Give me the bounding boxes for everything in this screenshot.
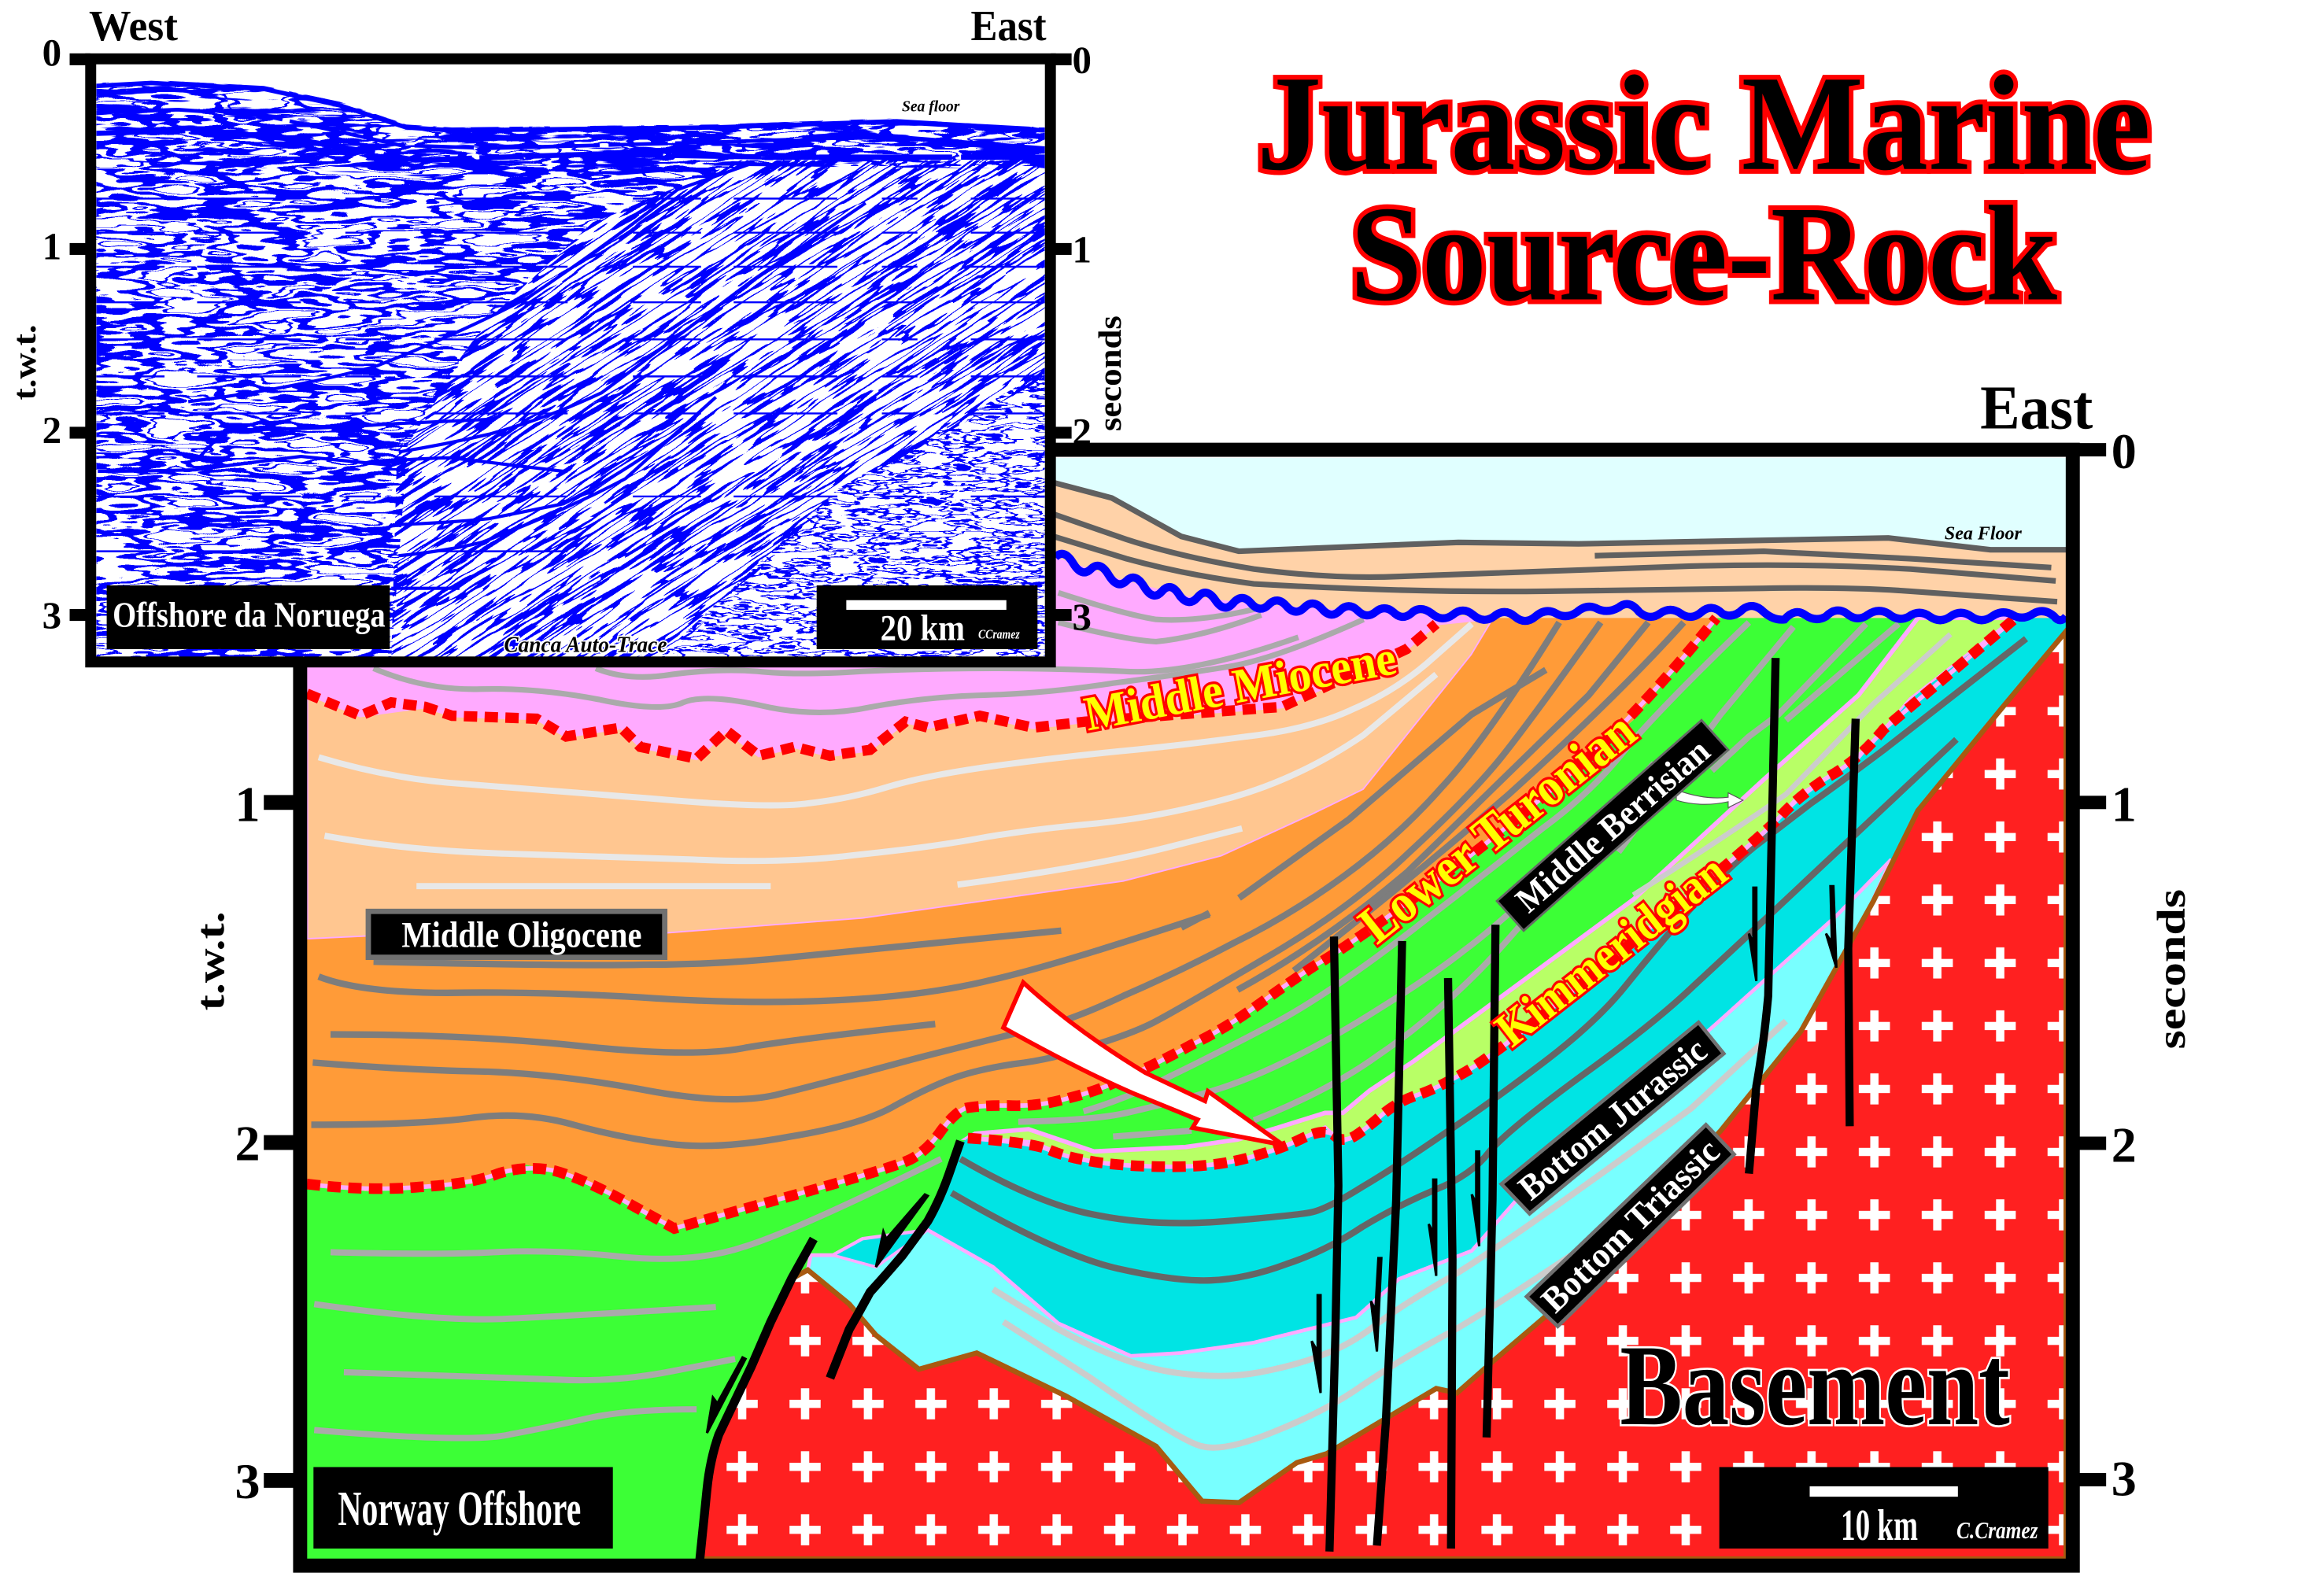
- main section axes, left: 3: [235, 1453, 260, 1509]
- layer: dark wedge beside block fault: [833, 1230, 928, 1267]
- unconformity: Kimmeridgian dotted line: [968, 618, 2015, 1167]
- seismic axes, left: 1: [42, 225, 61, 268]
- label: Sea Floor: Sea Floor: [1945, 523, 2022, 545]
- layer: Miocene pink unit: [307, 557, 1472, 757]
- panel: seismic line inset: [0, 0, 1862, 1441]
- main section axes, right: [2075, 423, 2137, 1506]
- axis title: t.w.t. main: t.w.t.: [188, 911, 232, 1010]
- seismic reflectors texture: [0, 0, 1862, 1441]
- title: [1257, 49, 2151, 329]
- layer: dark cyan Jurassic unit: [928, 618, 2066, 1356]
- label: East main: East: [1980, 374, 2093, 442]
- main section axes, right: 3: [2112, 1450, 2137, 1506]
- main section axes, right: 0: [2112, 423, 2137, 479]
- seismic axes, left: 0: [42, 31, 61, 74]
- label box: Bottom Jurassic: Bottom Jurassic: [1511, 1030, 1714, 1208]
- label box: Norway Offshore: [313, 1467, 613, 1549]
- layer: yellow-green Berriasian lens: [968, 618, 2015, 1168]
- reflectors: orange layer: [311, 622, 1683, 1146]
- axis title: seconds main: seconds: [2149, 889, 2193, 1049]
- sea water: [1056, 458, 2066, 548]
- unconformity: wavy blue line: [1055, 554, 2066, 621]
- seismic axes, right: 0: [1073, 38, 1092, 81]
- reflector: yellow-green lens: [1633, 634, 1950, 895]
- normal faults: [700, 658, 1856, 1562]
- unconformity: Lower Turonian dotted line: [307, 618, 1716, 1228]
- reflectors: light peach layer: [319, 624, 1472, 886]
- label: Sea floor: Sea floor: [902, 98, 960, 115]
- long horizontal reflectors: [96, 198, 1045, 552]
- reflectors: pale cyan layer: [993, 1021, 1786, 1448]
- title: Source-Rock: [1350, 179, 2058, 329]
- seismic axes, right: 3: [1073, 595, 1092, 638]
- main section axes, right: 1: [2112, 776, 2137, 832]
- label: East: East: [971, 2, 1047, 50]
- layer: post-unconformity sediments: [1056, 486, 2066, 618]
- scale bar: 20 km: [817, 585, 1037, 649]
- axis title: seconds seismic: seconds: [1092, 316, 1128, 431]
- seismic background: [91, 59, 1051, 663]
- label box: Middle Oligocene: Middle Oligocene: [401, 914, 641, 955]
- seismic frame: [91, 59, 1051, 662]
- seismic axes, right: 1: [1073, 227, 1092, 271]
- label: Kimmeridgian: Kimmeridgian: [1486, 844, 1737, 1057]
- seismic axes, right: 2: [1073, 410, 1092, 453]
- layer: pale cyan Triassic unit: [807, 859, 1891, 1503]
- label: Lower Turonian: Lower Turonian: [1347, 700, 1646, 954]
- unconformity: Middle Miocene red dotted line: [307, 624, 1436, 759]
- scale bar: 20 km: CCramez: [978, 627, 1020, 642]
- label: Basement: Basement: [1620, 1321, 2010, 1449]
- seismic axes, right: [1051, 38, 1092, 638]
- reflectors: Miocene pink layer: [374, 592, 1364, 712]
- axis title: t.w.t. seismic: t.w.t.: [6, 324, 42, 401]
- seismic axes, left: 2: [42, 408, 61, 452]
- label box: Offshore da Noruega: Offshore da Noruega: [113, 596, 386, 635]
- scale bar: 10 km: 10 km: [1841, 1501, 1918, 1550]
- main section axes, left: 2: [235, 1116, 260, 1172]
- label box: Bottom Triassic: Bottom Triassic: [1534, 1131, 1727, 1320]
- main section axes, right: 2: [2112, 1117, 2137, 1173]
- title: Jurassic Marine: [1257, 49, 2151, 199]
- main section axes, left: 1: [235, 776, 260, 832]
- main section axes, left: [235, 776, 301, 1509]
- label: Canca Auto-Trace: Canca Auto-Trace: [504, 633, 667, 658]
- scale bar: 10 km: C.Cramez: [1956, 1517, 2038, 1544]
- strong sea-floor reflector band: [96, 83, 1045, 160]
- scale bar: 10 km: [1720, 1467, 2049, 1550]
- layer: Cretaceous-Oligocene orange unit: [307, 618, 1716, 1228]
- label: Middle Miocene: Middle Miocene: [1080, 631, 1400, 741]
- reflectors: post-unconformity layer: [1022, 474, 2066, 602]
- label box: Offshore da Noruega: [107, 585, 390, 649]
- label box: Norway Offshore: Norway Offshore: [338, 1482, 581, 1536]
- layer: basement with white crosses: [700, 631, 2066, 1559]
- panel: interpreted geological cross-section: [188, 374, 2193, 1566]
- reflectors: green layer: [314, 622, 1898, 1438]
- seismic axes, left: 3: [42, 594, 61, 637]
- layer: Lower Cretaceous green unit: [307, 618, 1918, 1559]
- main section frame: [300, 450, 2073, 1566]
- strong dipping reflectors: [98, 163, 866, 589]
- label: West: West: [89, 2, 178, 50]
- seismic axes, left: [42, 31, 91, 637]
- label box: Middle Berrisian: Middle Berrisian: [1508, 731, 1717, 920]
- fault movement arrows: [707, 886, 1836, 1433]
- layer: Oligocene-Miocene light peach unit: [307, 618, 1494, 940]
- scale bar: 20 km: 20 km: [881, 608, 965, 649]
- large white arrow pointing to source rock: [1003, 983, 1283, 1145]
- small white arrow to Middle Berrisian: [1676, 790, 1743, 807]
- reflectors: dark cyan layer: [951, 639, 2026, 1280]
